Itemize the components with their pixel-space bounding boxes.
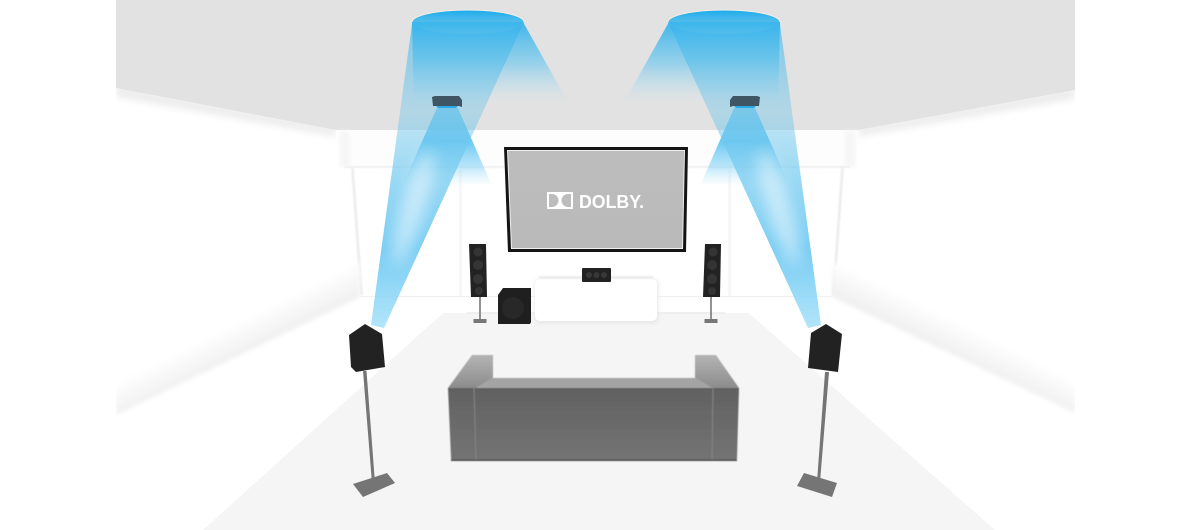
wall shadows under ceiling [116,86,336,136]
soffit [336,130,858,167]
right height beams and ceiling speaker [623,10,821,328]
Dolby logo: DOLBY. [579,192,644,212]
back wall edges [351,168,363,295]
right rear speaker [797,324,842,497]
left rear speaker [349,324,395,497]
console [535,276,658,323]
sofa [448,355,739,461]
right tower speaker [703,244,721,323]
subwoofer [498,288,531,324]
screen [504,147,688,252]
left tower speaker [469,244,487,323]
Dolby logo [547,192,644,212]
left height beams and ceiling speaker [371,10,569,328]
center speaker [582,268,611,282]
side wall base shading [116,262,360,415]
ceiling [116,0,1075,130]
floor [203,313,995,530]
